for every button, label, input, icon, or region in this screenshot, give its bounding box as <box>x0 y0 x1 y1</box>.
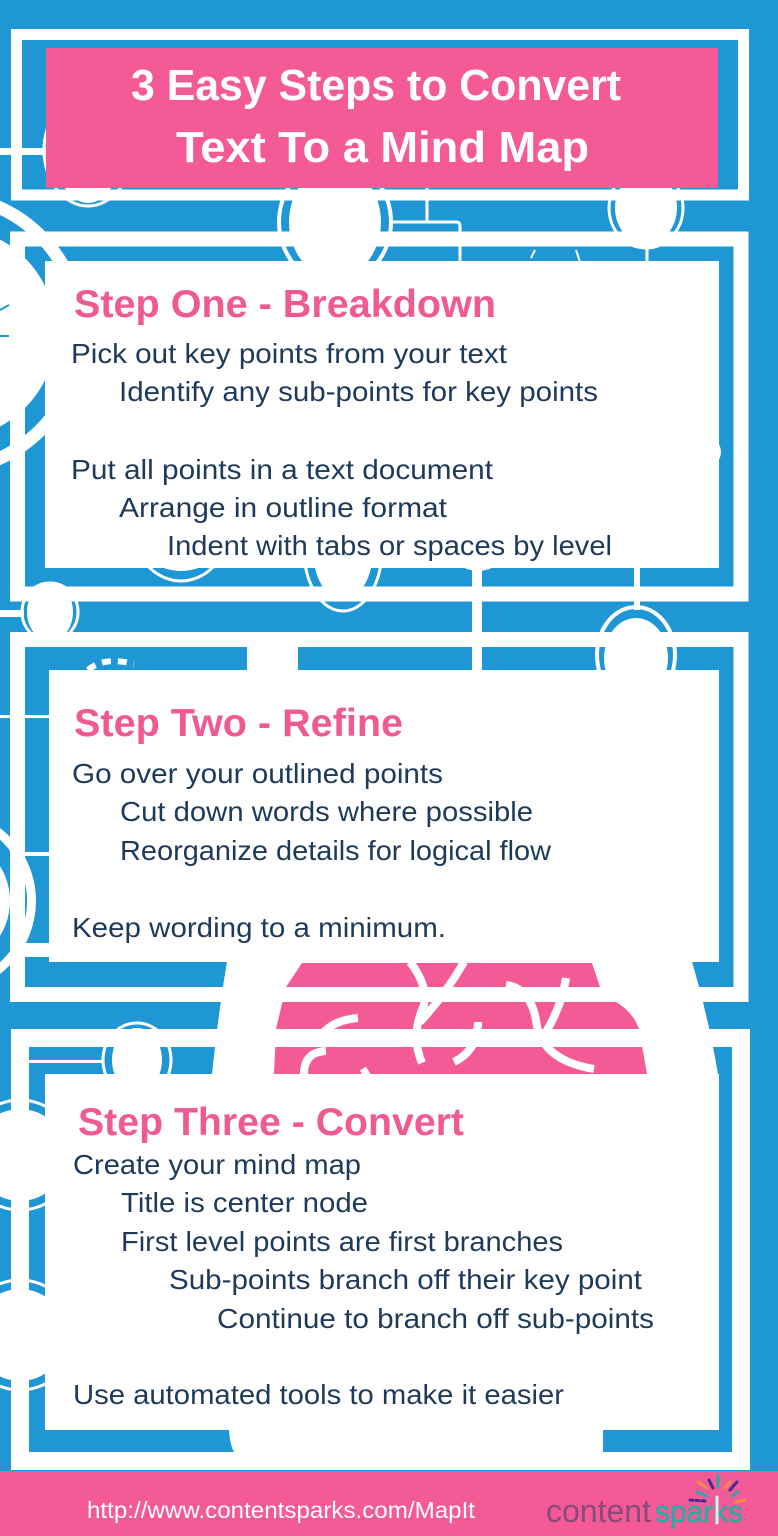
footer url: http://www.contentsparks.com/MapIt <box>87 1497 476 1523</box>
central brain node <box>210 955 720 1452</box>
text block: step one instructions: Arrange in outline format <box>119 492 447 523</box>
panel: step one <box>45 261 719 568</box>
text block: step three instructions: Continue to branch off sub-points <box>217 1303 654 1334</box>
logo: content sparks: content <box>546 1493 651 1529</box>
text block: step three instructions: Sub-points branch off their key point <box>169 1264 642 1295</box>
text block: step three instructions: First level points are first branches <box>121 1226 563 1257</box>
frame: title <box>16 34 744 195</box>
text block: step two instructions <box>72 758 552 943</box>
title banner: Text To a Mind Map <box>176 123 589 172</box>
text block: step two instructions: Go over your outlined points <box>72 758 443 789</box>
text block: step one instructions: Indent with tabs or spaces by level <box>167 530 612 561</box>
text block: step one instructions: Pick out key points from your text <box>71 338 507 369</box>
panel: step three <box>45 1074 719 1430</box>
text block: step one instructions: Identify any sub-points for key points <box>119 376 598 407</box>
footer bar <box>0 1471 778 1536</box>
heading: step three: Step Three - Convert <box>78 1101 464 1144</box>
heading: step two: Step Two - Refine <box>74 702 403 745</box>
heading: step one: Step One - Breakdown <box>74 283 496 326</box>
text block: step one instructions <box>71 338 612 561</box>
title banner: 3 Easy Steps to Convert <box>131 61 621 110</box>
text block: step three instructions: Create your mind map <box>73 1149 361 1180</box>
logo: content sparks: sparks <box>655 1494 743 1529</box>
frame: step three <box>20 1038 741 1461</box>
text block: step three instructions: Title is center node <box>121 1187 368 1218</box>
mind map background circles and connectors <box>0 94 721 1097</box>
frame: step one <box>18 239 741 594</box>
panel: step two <box>49 670 719 962</box>
logo: content sparks <box>546 1475 745 1529</box>
text block: step one instructions: Put all points in a text document <box>71 454 493 485</box>
text block: step two instructions: Reorganize details for logical flow <box>120 835 552 866</box>
title banner <box>46 48 718 188</box>
text block: step three instructions: Use automated tools to make it easier <box>73 1379 564 1410</box>
text block: step two instructions: Cut down words where possible <box>120 796 533 827</box>
text block: step two instructions: Keep wording to a minimum. <box>72 912 446 943</box>
text block: step three instructions <box>73 1149 654 1410</box>
frame: step two <box>18 640 741 994</box>
left nodes of step three <box>0 1100 75 1390</box>
